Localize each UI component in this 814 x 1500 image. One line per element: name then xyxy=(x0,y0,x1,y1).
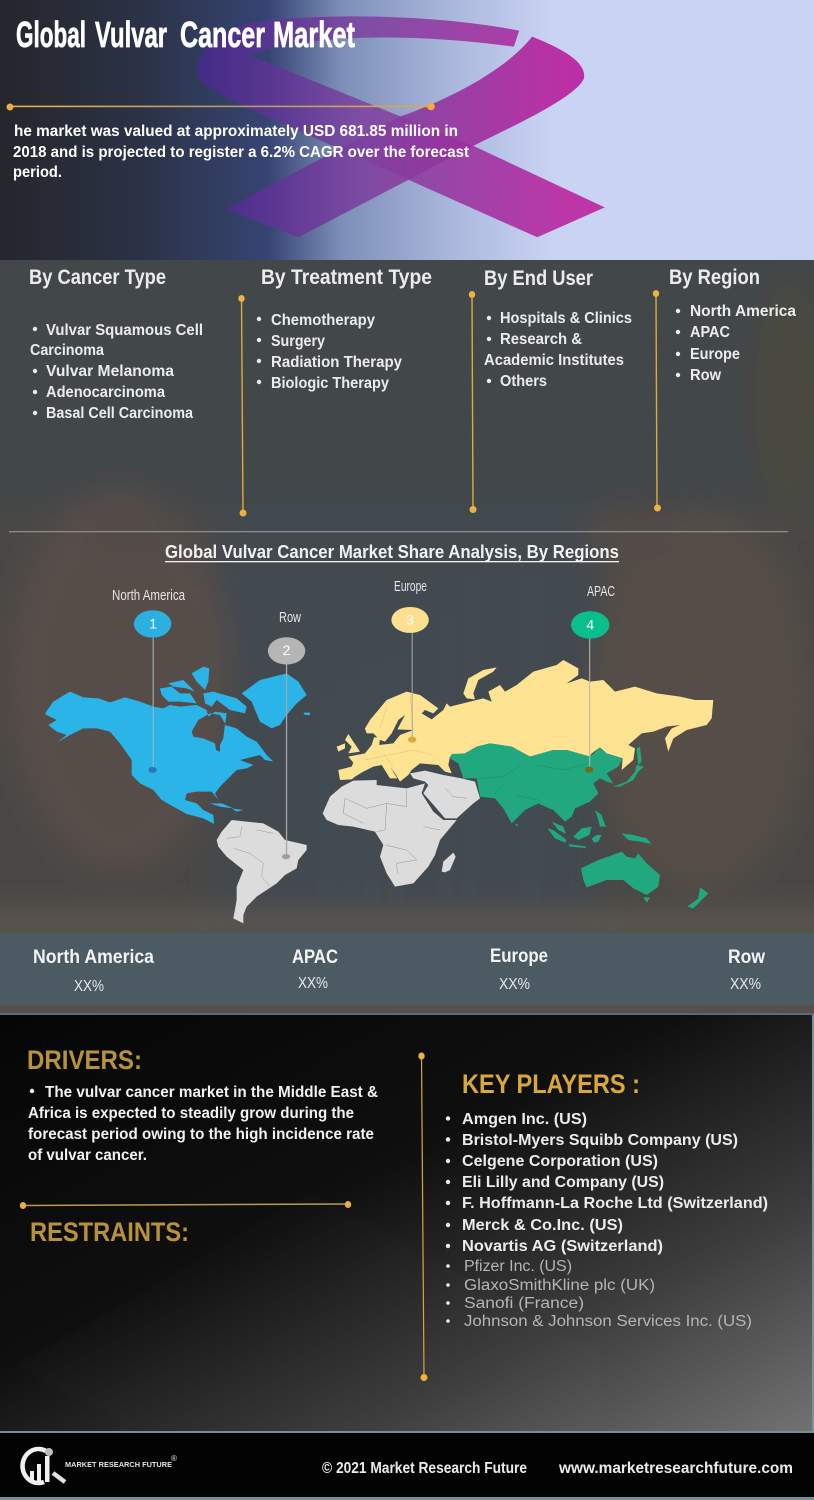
logo: Market Research Future: ® xyxy=(171,1454,177,1463)
stat: Row xyxy=(728,947,765,993)
divider: cancer type / treatment xyxy=(238,295,246,516)
stat: Row: XX% xyxy=(730,976,761,993)
stat: North America: North America xyxy=(33,947,154,968)
title: Vulvar xyxy=(95,14,167,55)
player list: Eli Lilly and Company (US) xyxy=(462,1174,664,1191)
region: Row - South America xyxy=(217,820,307,923)
player list: F. Hoffmann-La Roche Ltd (Switzerland) xyxy=(462,1195,768,1212)
list: Others xyxy=(500,373,547,390)
map label: APAC: APAC xyxy=(587,583,615,600)
website: www.marketresearchfuture.com xyxy=(558,1460,793,1477)
map label: Europe: Europe xyxy=(394,578,427,595)
list xyxy=(676,303,796,384)
list: Biologic Therapy xyxy=(271,375,389,392)
stat: North America: XX% xyxy=(74,978,104,995)
panel: key players xyxy=(446,1069,768,1330)
intro text xyxy=(13,123,470,181)
logo: Market Research Future xyxy=(23,1448,177,1483)
pin 3: Europe xyxy=(391,607,429,743)
title: Global xyxy=(16,14,86,55)
map label: North America: North America xyxy=(112,587,185,604)
pin 4: APAC: 4 xyxy=(586,616,594,632)
pin 1: North America: 1 xyxy=(149,615,157,631)
intro text: 2018 and is projected to register a 6.2% CAGR over the forecast xyxy=(13,144,470,161)
panel: by treatment type xyxy=(257,266,432,392)
divider: end user / region xyxy=(653,290,661,512)
list: Basal Cell Carcinoma xyxy=(46,405,193,422)
divider line with dots xyxy=(6,103,435,110)
list: Research & xyxy=(500,331,582,348)
logo: Market Research Future: MARKET RESEARCH FUTURE xyxy=(65,1460,172,1469)
panel: by region xyxy=(669,266,796,384)
list: Academic Institutes xyxy=(484,352,624,369)
list: Carcinoma xyxy=(30,342,104,359)
title: Market xyxy=(273,14,355,55)
chart: world map xyxy=(45,607,713,923)
map heading: Global Vulvar Cancer Market Share Analysis, By Regions xyxy=(165,542,619,562)
stat: North America xyxy=(33,947,154,995)
region: Asia Pacific xyxy=(450,743,708,908)
map label: Row: Row xyxy=(279,609,301,626)
panel: drivers, restraints and key players background xyxy=(0,1013,814,1433)
list: Radiation Therapy xyxy=(271,354,402,371)
heading: DRIVERS: xyxy=(27,1045,142,1075)
player list: Pfizer Inc. (US) xyxy=(464,1258,572,1275)
pin 2: Row: 2 xyxy=(283,642,291,658)
title xyxy=(16,14,355,55)
list: Surgery xyxy=(271,333,325,350)
list xyxy=(257,312,402,392)
list xyxy=(484,310,632,390)
stat: Europe: XX% xyxy=(499,976,530,993)
player list: Sanofi (France) xyxy=(464,1295,584,1312)
list: Hospitals & Clinics xyxy=(500,310,632,327)
list: Row xyxy=(690,367,722,384)
player list: GlaxoSmithKline plc (UK) xyxy=(464,1277,655,1294)
panel: drivers xyxy=(27,1045,378,1164)
player list: Merck & Co.Inc. (US) xyxy=(462,1217,623,1234)
heading: By Treatment Type xyxy=(261,266,432,289)
heading: By Region xyxy=(669,266,760,289)
copyright: © 2021 Market Research Future xyxy=(322,1460,527,1477)
stat: Europe xyxy=(490,946,548,993)
list: Europe xyxy=(690,346,740,363)
player list: Amgen Inc. (US) xyxy=(462,1111,587,1128)
pin 4: APAC xyxy=(571,611,609,773)
player list xyxy=(446,1111,768,1330)
panel: by end user xyxy=(484,267,632,390)
list: Adenocarcinoma xyxy=(46,384,165,401)
driver text: Africa is expected to steadily grow during the xyxy=(28,1105,354,1122)
title: Cancer xyxy=(180,14,265,55)
pin 1: North America xyxy=(134,610,171,773)
icon: awareness ribbon xyxy=(197,16,605,237)
panel: footer xyxy=(0,1431,814,1500)
divider: key players xyxy=(418,1052,428,1381)
driver text xyxy=(28,1084,378,1164)
intro text: he market was valued at approximately USD 681.85 million in xyxy=(14,123,458,140)
list xyxy=(30,322,203,422)
driver text: forecast period owing to the high incidence rate xyxy=(28,1126,374,1143)
divider: drivers / restraints xyxy=(20,1201,351,1209)
list: Vulvar Melanoma xyxy=(46,363,174,380)
player list: Novartis AG (Switzerland) xyxy=(462,1238,663,1255)
intro text: period. xyxy=(13,164,62,181)
list: Vulvar Squamous Cell xyxy=(46,322,203,339)
driver text: of vulvar cancer. xyxy=(28,1147,147,1164)
pin 2: Row xyxy=(268,637,305,859)
stat: Row: Row xyxy=(728,947,765,968)
list: Chemotherapy xyxy=(271,312,375,329)
stat: APAC xyxy=(292,947,338,992)
heading: By End User xyxy=(484,267,593,290)
driver text: The vulvar cancer market in the Middle East & xyxy=(45,1084,378,1101)
pin 3: Europe: 3 xyxy=(406,611,414,627)
panel: regional share band xyxy=(0,933,814,1005)
stat: APAC: APAC xyxy=(292,947,338,968)
region: Europe and Russia xyxy=(337,660,713,782)
divider: treatment / end user xyxy=(469,291,476,513)
list: North America xyxy=(690,303,796,320)
list: APAC xyxy=(690,324,730,341)
panel: header with ribbon xyxy=(0,0,814,260)
heading: By Cancer Type xyxy=(29,266,166,289)
panel: restraints: RESTRAINTS: xyxy=(30,1217,189,1247)
player list: Johnson & Johnson Services Inc. (US) xyxy=(464,1313,752,1330)
player list: Celgene Corporation (US) xyxy=(462,1153,658,1170)
panel: segmentation and map background xyxy=(0,240,814,1014)
stat: Europe: Europe xyxy=(490,946,548,967)
stat: APAC: XX% xyxy=(298,975,328,992)
region: Row - Africa and Middle East xyxy=(323,771,480,887)
heading: KEY PLAYERS : xyxy=(462,1069,640,1099)
player list: Bristol-Myers Squibb Company (US) xyxy=(462,1132,738,1149)
region: North America xyxy=(45,667,310,824)
panel: by cancer type xyxy=(29,266,203,422)
